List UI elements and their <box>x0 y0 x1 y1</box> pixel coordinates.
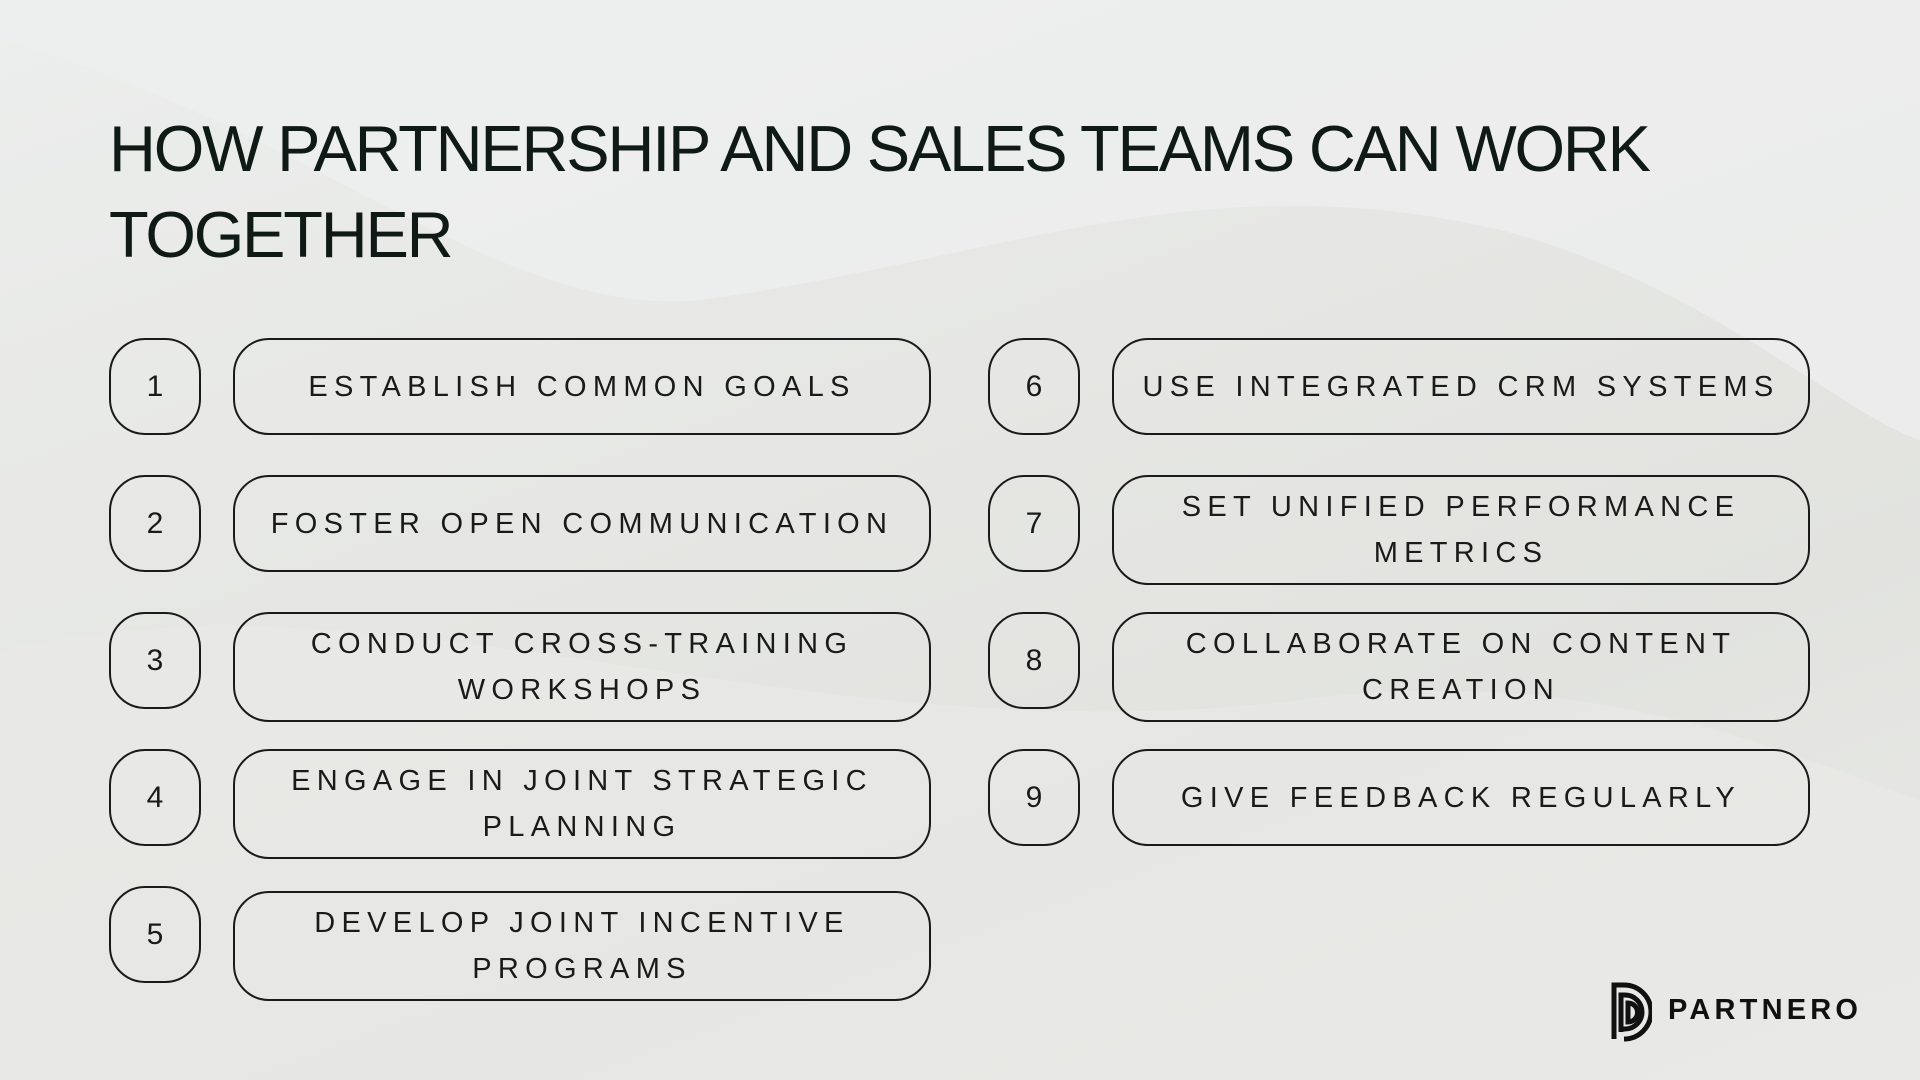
number 6 <box>988 338 1080 435</box>
item 6 <box>1112 338 1810 435</box>
number 1: 1 <box>147 370 163 402</box>
number 3: 3 <box>147 644 163 676</box>
item 9 <box>1112 749 1810 846</box>
number 9 <box>988 749 1080 846</box>
item 4: PLANNING <box>483 811 681 843</box>
number 7 <box>988 475 1080 572</box>
item 1: ESTABLISH COMMON GOALS <box>308 370 856 402</box>
item 4 <box>233 749 931 859</box>
number 7: 7 <box>1026 506 1042 540</box>
number 4 <box>109 749 201 846</box>
item 9: GIVE FEEDBACK REGULARLY <box>1181 782 1741 814</box>
icon: partnero mark <box>1612 982 1652 1042</box>
number 8: 8 <box>1026 644 1042 676</box>
item 8 <box>1112 612 1810 722</box>
title: HOW PARTNERSHIP AND SALES TEAMS CAN WORK TOGETHER <box>109 112 1649 271</box>
item 3 <box>233 612 931 722</box>
item 4: ENGAGE IN JOINT STRATEGIC <box>291 765 873 797</box>
item 2: FOSTER OPEN COMMUNICATION <box>271 508 893 540</box>
logo <box>1612 982 1862 1042</box>
item 8: COLLABORATE ON CONTENT <box>1186 628 1736 660</box>
logo text: PARTNERO <box>1668 994 1862 1026</box>
number 5: 5 <box>147 918 163 950</box>
number 3 <box>109 612 201 709</box>
number 6: 6 <box>1026 370 1042 402</box>
number 8 <box>988 612 1080 709</box>
item 5: DEVELOP JOINT INCENTIVE <box>314 907 850 939</box>
number 1 <box>109 338 201 435</box>
item 3: WORKSHOPS <box>458 674 706 706</box>
number 5 <box>109 886 201 983</box>
number 2: 2 <box>147 506 163 540</box>
item 7: METRICS <box>1374 537 1548 569</box>
item 1 <box>233 338 931 435</box>
item 5: PROGRAMS <box>472 953 692 985</box>
number 9: 9 <box>1026 780 1042 814</box>
item 5 <box>233 891 931 1001</box>
item 3: CONDUCT CROSS-TRAINING <box>311 628 853 660</box>
number 2 <box>109 475 201 572</box>
item 7: SET UNIFIED PERFORMANCE <box>1182 491 1740 523</box>
item 2 <box>233 475 931 572</box>
item 7 <box>1112 475 1810 585</box>
number 4: 4 <box>147 780 163 814</box>
item 6: USE INTEGRATED CRM SYSTEMS <box>1142 370 1779 402</box>
item 8: CREATION <box>1362 674 1560 706</box>
